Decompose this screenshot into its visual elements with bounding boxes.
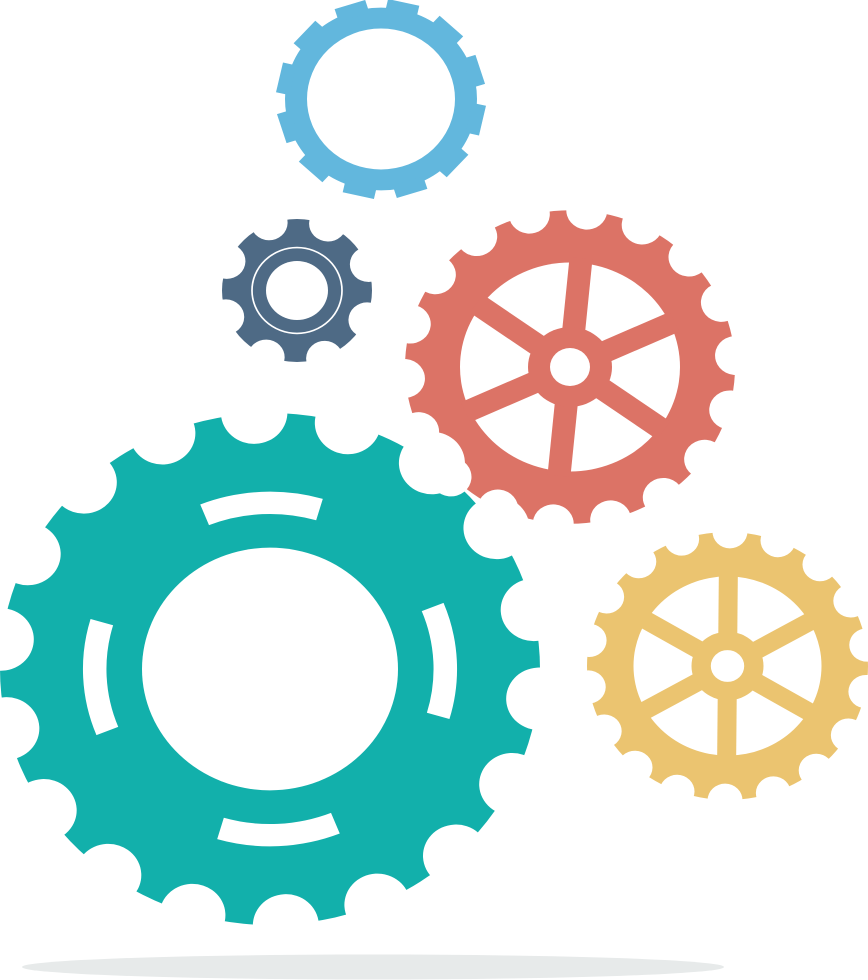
red gear notches	[388, 194, 752, 540]
teal gear notches	[0, 398, 556, 940]
gear: yellow spoked wheel	[584, 529, 868, 803]
gear: small dark blue	[196, 194, 398, 387]
ground shadow	[22, 954, 724, 980]
gear: light blue ring	[276, 0, 486, 199]
gear: red spoked wheel	[405, 210, 735, 524]
gear: large teal body	[0, 413, 540, 925]
